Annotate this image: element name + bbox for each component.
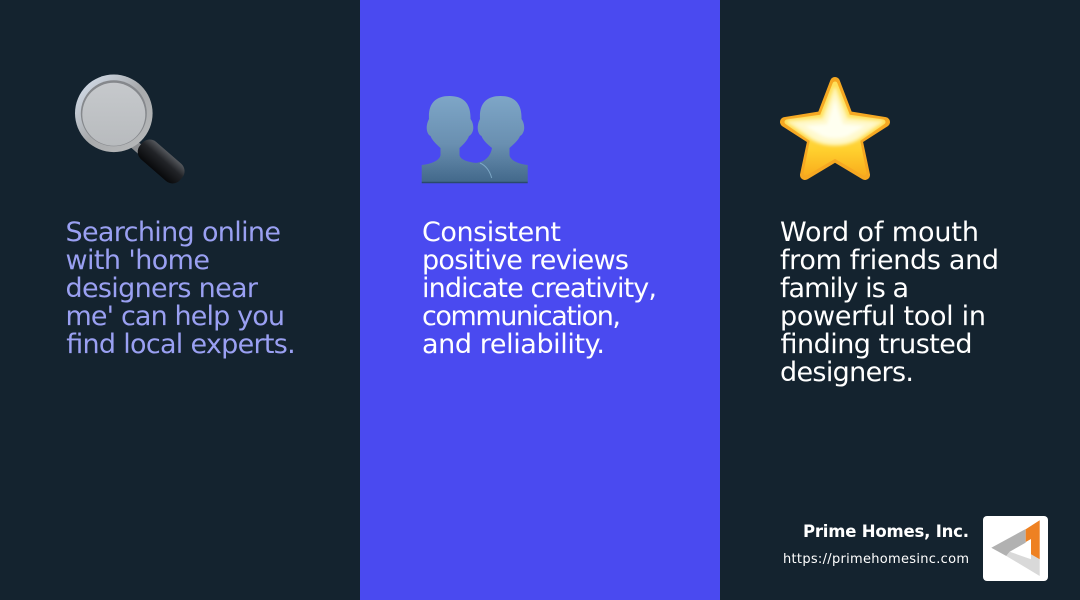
text: word of mouth: designers. bbox=[780, 357, 914, 388]
text: positive reviews: and reliability. bbox=[422, 329, 605, 360]
text: company name: Prime Homes, Inc. bbox=[803, 522, 969, 541]
panel: word of mouth bbox=[720, 0, 1080, 600]
icon: magnifying glass bbox=[75, 74, 189, 188]
text: searching online: with 'home bbox=[66, 245, 210, 276]
text: searching online: designers near bbox=[66, 273, 259, 304]
text: searching online: find local experts. bbox=[66, 329, 296, 360]
text: positive reviews: Consistent bbox=[422, 217, 561, 248]
panel: search online bbox=[0, 0, 360, 600]
text: word of mouth: Word of mouth bbox=[780, 217, 979, 248]
text: word of mouth: family is a bbox=[780, 273, 909, 304]
icon: star bbox=[785, 82, 885, 175]
text: searching online: Searching online bbox=[66, 217, 281, 248]
text: positive reviews bbox=[422, 217, 657, 360]
icon: two people silhouettes bbox=[422, 96, 528, 182]
text: word of mouth: powerful tool in bbox=[780, 301, 986, 332]
text: positive reviews: indicate creativity, bbox=[422, 273, 657, 304]
text: word of mouth: finding trusted bbox=[781, 329, 973, 360]
icon: company logo bbox=[983, 516, 1048, 581]
text: positive reviews: communication, bbox=[422, 301, 621, 332]
panel: positive reviews bbox=[360, 0, 720, 600]
text: word of mouth bbox=[780, 217, 999, 388]
text: positive reviews: positive reviews bbox=[422, 245, 629, 276]
text: website url: https://primehomesinc.com bbox=[783, 552, 969, 567]
text: searching online: me' can help you bbox=[66, 301, 285, 332]
text: searching online bbox=[66, 217, 296, 360]
text: word of mouth: from friends and bbox=[780, 245, 999, 276]
